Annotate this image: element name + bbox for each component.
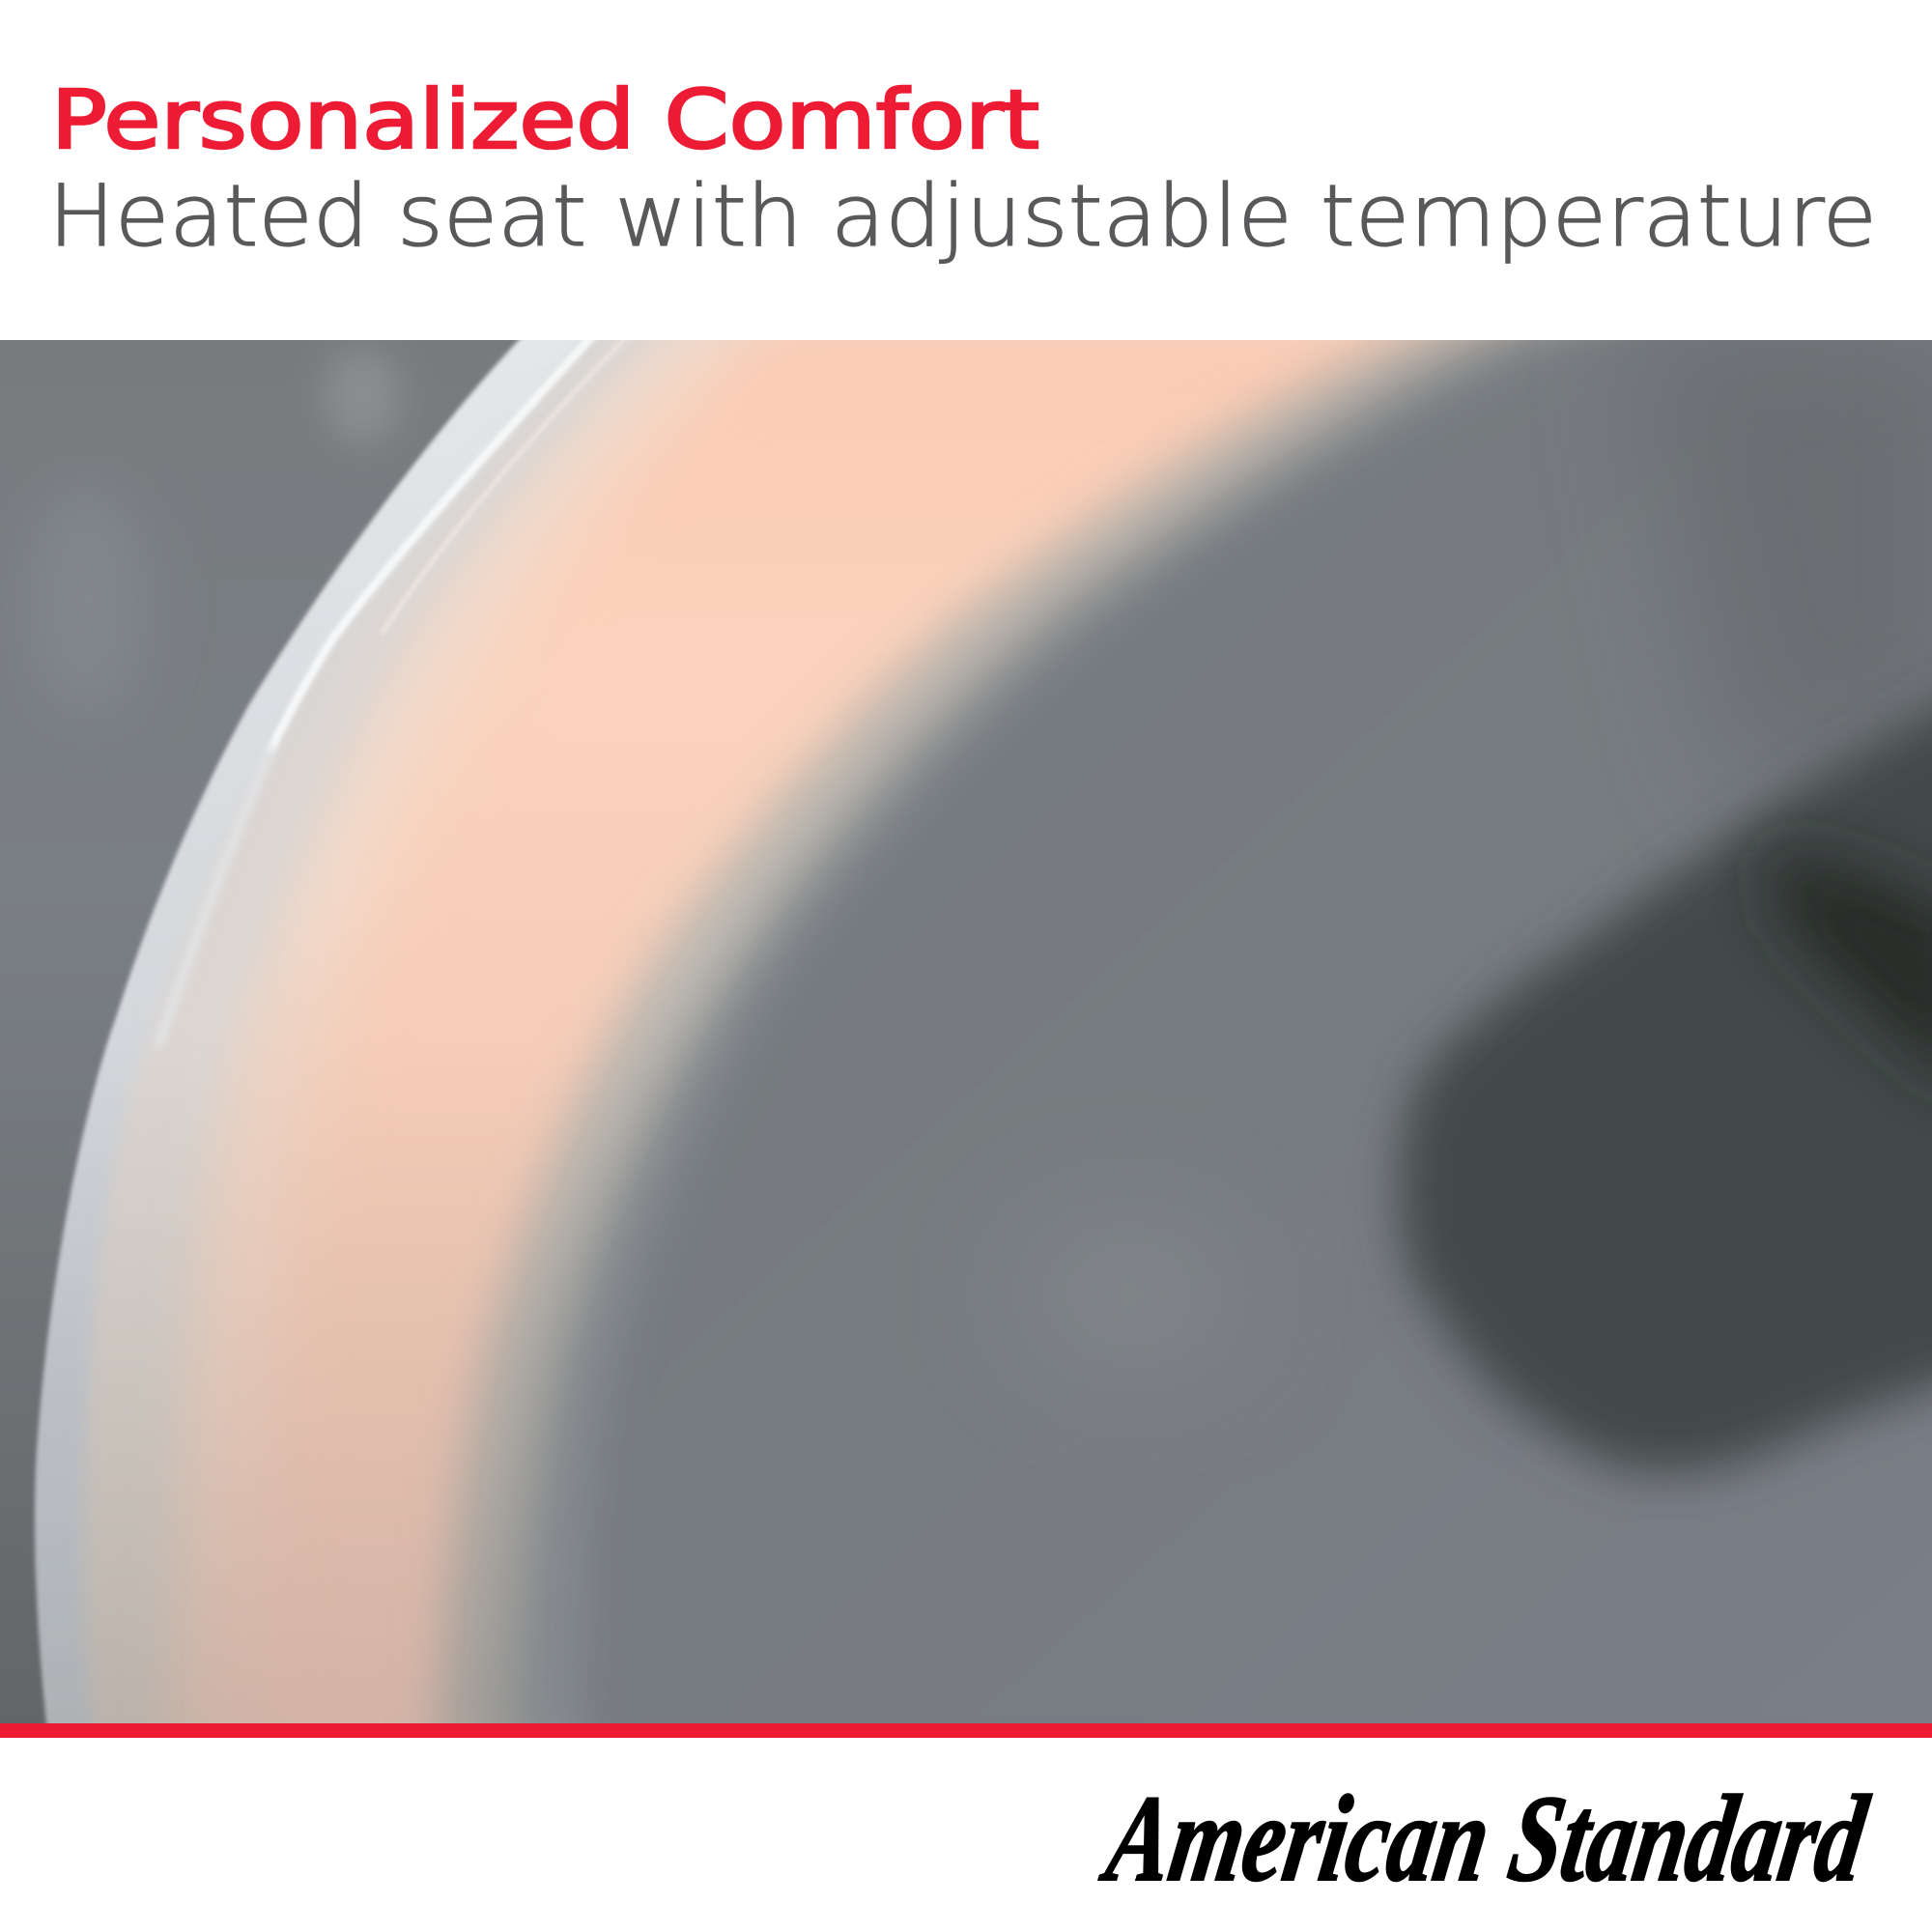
heated band, pale outer [172,340,769,1723]
pale water sheen [1024,1227,1236,1362]
bowl interior [584,319,1932,1758]
bowl edge, cream transition [418,340,1557,1723]
dark water hole [1399,676,1932,1473]
rim highlights [159,328,630,1043]
dark core [1768,850,1932,1092]
seat rim [33,340,599,1723]
upper right bowl shade [1677,340,1932,758]
red divider bar [0,1723,1932,1738]
rim inner grey zone [86,340,667,1723]
subheading: Heated seat with adjustable temperature: Heated seat with adjustable temperature [48,166,1877,266]
heated band, saturated core [295,340,1403,1453]
heading: Personalized Comfort: Personalized Comfort [51,72,1039,167]
photo: heated toilet seat close-up [0,319,1932,1758]
title [48,72,1877,266]
bowl edge, blue-grey transition [498,340,1634,1723]
